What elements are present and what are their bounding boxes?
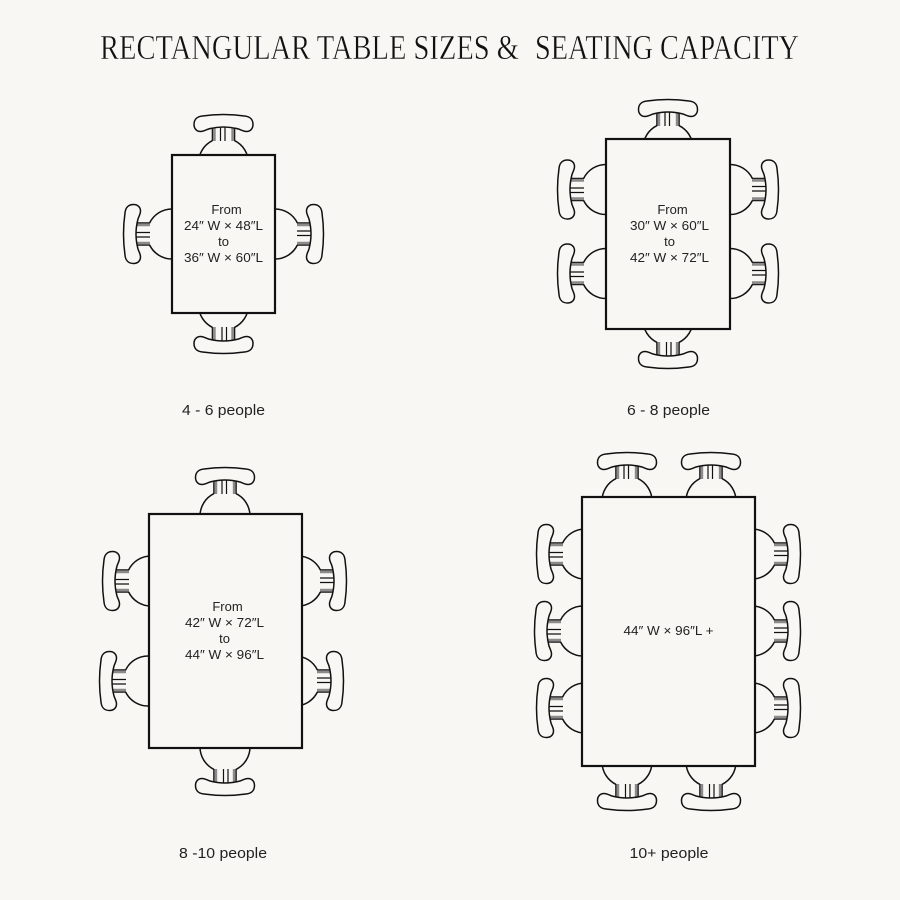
chair: left 1 bbox=[536, 524, 585, 584]
chair: left bbox=[124, 204, 172, 264]
chair: right upper bbox=[298, 552, 346, 610]
panel: 8 - 10 people table bbox=[100, 468, 346, 796]
chair: bottom bbox=[638, 320, 698, 368]
chair: left lower bbox=[558, 244, 606, 303]
chair: right lower bbox=[730, 244, 778, 303]
panel: 4 - 6 people table bbox=[124, 114, 324, 354]
table outline bbox=[606, 139, 730, 329]
table size text: 44″ W × 96″L bbox=[185, 647, 264, 662]
chair: bottom bbox=[194, 305, 253, 354]
table outline bbox=[172, 155, 275, 313]
table outline bbox=[582, 497, 755, 766]
chair: right bbox=[275, 204, 324, 264]
table size text: to bbox=[664, 234, 675, 249]
table outline bbox=[149, 514, 302, 748]
chair: right 2 bbox=[752, 602, 800, 660]
table size text: From bbox=[211, 202, 242, 217]
caption: 8 - 10 people: 8 -10 people bbox=[179, 846, 267, 862]
chair: left upper bbox=[558, 160, 606, 219]
chair: left 2 bbox=[534, 602, 583, 660]
table size text bbox=[630, 202, 709, 265]
chair: top right bbox=[682, 452, 740, 501]
chair: left 3 bbox=[536, 678, 585, 738]
panel: 10+ people table bbox=[534, 452, 800, 810]
chair: right 1 bbox=[752, 524, 800, 584]
chair: left lower bbox=[100, 652, 148, 710]
table size text bbox=[185, 599, 264, 662]
table size text bbox=[184, 202, 263, 265]
chair: bottom bbox=[196, 747, 254, 796]
chair: bottom right bbox=[682, 762, 740, 810]
chair: top bbox=[194, 114, 253, 163]
table size text: to bbox=[218, 234, 229, 249]
chair: right upper bbox=[730, 160, 778, 219]
caption: 4 - 6 people: 4 - 6 people bbox=[182, 403, 265, 419]
title: SEATING CAPACITY bbox=[535, 28, 799, 67]
chair: top bbox=[638, 100, 698, 148]
caption: 6 - 8 people: 6 - 8 people bbox=[627, 403, 710, 419]
chair: top left bbox=[598, 452, 656, 501]
chair: right 3 bbox=[752, 678, 800, 738]
chair: right lower bbox=[295, 652, 344, 710]
panel: 6 - 8 people table bbox=[558, 100, 778, 368]
table size text: 42″ W × 72″L bbox=[185, 615, 264, 630]
table size text: From bbox=[212, 599, 243, 614]
table size text: From bbox=[657, 202, 688, 217]
table size text: 44″ W × 96″L + bbox=[624, 623, 714, 638]
title: RECTANGULAR TABLE SIZES & bbox=[100, 28, 519, 67]
table size text: to bbox=[219, 631, 230, 646]
table size text: 24″ W × 48″L bbox=[184, 218, 263, 233]
caption: 10+ people: 10+ people bbox=[630, 846, 708, 862]
table size text: 36″ W × 60″L bbox=[184, 250, 263, 265]
table size text: 30″ W × 60″L bbox=[630, 218, 709, 233]
table size text: 42″ W × 72″L bbox=[630, 250, 709, 265]
chair: bottom left bbox=[598, 762, 656, 810]
chair: top bbox=[196, 468, 254, 516]
chair: left upper bbox=[102, 552, 151, 610]
